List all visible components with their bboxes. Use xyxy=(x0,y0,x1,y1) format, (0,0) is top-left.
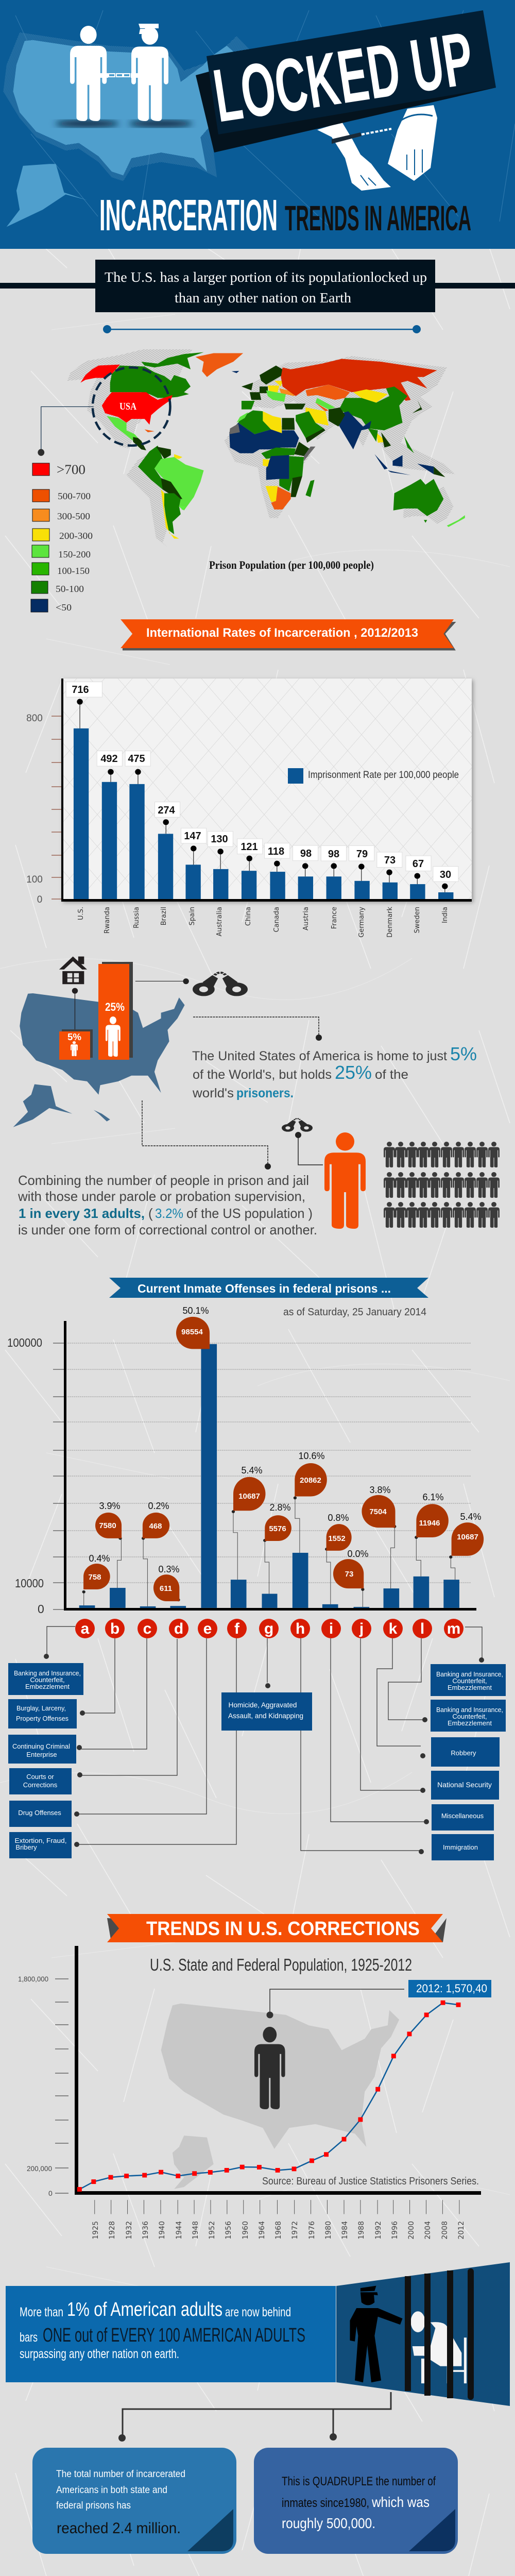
chart value labels: 118 xyxy=(268,846,284,857)
icon: handcuffed hands xyxy=(317,105,437,191)
category labels: Embezzlement xyxy=(448,1684,492,1691)
x labels: 1944 xyxy=(175,2221,183,2240)
legend: prison population colours: >700 xyxy=(57,462,85,477)
text: combined correctional control: 1 in every 31 adults, xyxy=(19,1206,145,1221)
icon: shadows under figures xyxy=(55,120,193,127)
text: chart source: Source: Bureau of Justice Statistics Prisoners Series. xyxy=(262,2176,479,2187)
map: South America xyxy=(138,446,204,538)
leader lines to categories xyxy=(47,1626,482,1851)
icon: orange person xyxy=(324,1132,366,1229)
category labels: Counterfeit, xyxy=(452,1713,487,1720)
chart country labels: Brazil xyxy=(160,907,168,925)
caption: map title: Prison Population (per 100,000 people) xyxy=(209,558,374,571)
heading: trends ribbon: TRENDS IN U.S. CORRECTIONS xyxy=(146,1918,420,1940)
chart value labels: 147 xyxy=(184,831,201,842)
category labels: Embezzlement xyxy=(448,1719,492,1727)
chart value labels xyxy=(72,684,451,880)
bubble percentages: 5.4% xyxy=(460,1512,482,1522)
letter markers a to m: j xyxy=(359,1620,364,1637)
letter markers a to m: i xyxy=(329,1620,333,1637)
connector to orange figure xyxy=(295,1132,323,1165)
card: 2.4 million: The total number of incarcerated xyxy=(56,2469,185,2480)
connector: 2012 callout to person xyxy=(267,1989,404,2019)
letter markers a to m: f xyxy=(234,1620,240,1637)
highlight: dashed ellipse around USA xyxy=(93,367,170,446)
x labels: 1936 xyxy=(142,2221,150,2240)
map: grey USA xyxy=(161,2004,399,2189)
x labels: 1964 xyxy=(258,2221,266,2240)
category labels: Courts or xyxy=(26,1773,54,1781)
letter markers a to m: g xyxy=(264,1620,273,1637)
chart country labels: U.S. xyxy=(77,907,85,920)
text: 5 percent of the world's population xyxy=(192,1043,477,1100)
bubble percentages: 6.1% xyxy=(422,1492,444,1502)
category labels: Embezzlement xyxy=(25,1683,70,1690)
x labels: 2004 xyxy=(424,2221,432,2240)
text: combined correctional control: of the US population ) xyxy=(186,1206,313,1221)
panel: intro headline bar xyxy=(0,260,515,312)
text: 5 percent of the world's population: of the xyxy=(375,1067,408,1082)
category labels: Corrections xyxy=(23,1781,58,1789)
legend: prison population colours: 50-100 xyxy=(56,584,84,594)
chart value labels: 98 xyxy=(328,849,339,860)
category labels: Drug Offenses xyxy=(18,1809,61,1817)
y labels xyxy=(18,1975,53,2197)
panel: hero header: INCARCERATION xyxy=(99,191,278,240)
axis labels: 0 xyxy=(38,1602,44,1616)
chart value labels: 716 xyxy=(72,684,89,696)
x labels: 1980 xyxy=(324,2221,333,2240)
card: quadruple: inmates since1980, xyxy=(282,2496,369,2510)
text: combined correctional control: ( xyxy=(148,1206,153,1221)
label: USA: USA xyxy=(119,401,136,412)
grid lines xyxy=(67,1343,471,1583)
axis labels: 10000 xyxy=(15,1577,44,1590)
chart y labels: 800 xyxy=(26,713,43,724)
connector to legend xyxy=(38,406,94,456)
heading: inmate offenses ribbon xyxy=(109,1278,428,1298)
text: 5 percent of the world's population: world's xyxy=(192,1086,234,1100)
bubble percentages: 3.8% xyxy=(369,1485,391,1495)
bubble percentages: 0.4% xyxy=(89,1553,110,1564)
chart axis xyxy=(61,679,472,902)
text: one in 100 adults: bars xyxy=(20,2330,38,2345)
category labels xyxy=(12,1669,503,1851)
text: combined correctional control: 3.2% xyxy=(155,1206,183,1221)
chart value labels: 98 xyxy=(300,848,312,859)
bubble values: 758 xyxy=(88,1573,101,1582)
category labels: Banking and Insurance, xyxy=(436,1706,503,1714)
category labels: Homicide, Aggravated xyxy=(229,1701,297,1709)
bubble values: 20862 xyxy=(300,1476,321,1485)
chart legend: Imprisonment Rate per 100,000 people xyxy=(308,770,459,781)
callout: 2012 value: 2012: 1,570,40 xyxy=(416,1982,487,1995)
x labels: 1976 xyxy=(308,2221,316,2240)
letter markers a to m xyxy=(75,1619,464,1638)
chart country labels xyxy=(77,907,449,938)
category labels: Miscellaneous xyxy=(441,1812,484,1820)
bubble values: 7504 xyxy=(369,1507,387,1516)
icon: small handcuffs xyxy=(284,1118,311,1131)
chart legend xyxy=(288,768,459,784)
map: Europe xyxy=(242,366,297,410)
x labels: 1960 xyxy=(242,2221,250,2240)
chart country labels: Rwanda xyxy=(104,907,111,934)
map: USA silhouette xyxy=(3,32,250,227)
chart country labels: Germany xyxy=(358,907,366,938)
x labels: 1956 xyxy=(225,2221,233,2240)
text: date note: as of Saturday, 25 January 2014 xyxy=(283,1307,426,1318)
bar: 25 percent xyxy=(98,962,133,1060)
chart y ticks xyxy=(52,716,61,899)
chart y labels: 100 xyxy=(26,874,43,885)
bubble values: 10687 xyxy=(457,1533,478,1541)
legend: prison population colours: <50 xyxy=(56,602,72,613)
chart country labels: Sweden xyxy=(414,907,421,933)
card: 2.4 million: Americans in both state and xyxy=(56,2485,167,2496)
line and markers xyxy=(77,2001,460,2214)
x labels: 1928 xyxy=(108,2221,116,2240)
divider with end dots xyxy=(103,325,421,333)
bars xyxy=(79,1317,484,1608)
map: Oceania xyxy=(393,479,465,527)
x labels: 1988 xyxy=(357,2221,366,2240)
text: one in 100 adults: are now behind xyxy=(225,2305,291,2319)
icon: crowd of prisoners xyxy=(384,1142,500,1228)
y labels: 0 xyxy=(48,2189,53,2197)
card: 2.4 million: federal prisons has xyxy=(56,2500,131,2511)
map: USA blue xyxy=(13,993,185,1127)
bar: 25 percent: 25% xyxy=(105,1001,125,1013)
chart country labels: Denmark xyxy=(386,907,394,938)
chart value labels: 79 xyxy=(356,849,368,860)
text: 5 percent of the world's population: 5% xyxy=(450,1043,477,1064)
bubble values: 5576 xyxy=(269,1524,286,1533)
bubble values: 1552 xyxy=(328,1534,346,1543)
letter markers a to m: h xyxy=(296,1620,305,1637)
chart y labels: 0 xyxy=(37,894,42,905)
card: 2.4 million: reached 2.4 million. xyxy=(57,2520,181,2537)
leader dots xyxy=(44,1654,484,1854)
letter markers a to m: k xyxy=(389,1620,398,1637)
chart country labels: Austria xyxy=(302,907,310,930)
officer xyxy=(350,2286,403,2382)
icon: handcuff chain between figures xyxy=(100,74,139,77)
chart: US corrections population line xyxy=(18,1946,491,2240)
chart country labels: Russia xyxy=(133,907,141,928)
x labels: 1996 xyxy=(391,2221,399,2240)
bubble values: 468 xyxy=(149,1522,162,1531)
heading: international rates ribbon: International Rates of Incarceration , 2012/2013 xyxy=(146,626,418,640)
legend: prison population colours: 500-700 xyxy=(58,491,91,501)
category labels: Counterfeit, xyxy=(30,1676,65,1684)
bubble values: 611 xyxy=(160,1584,172,1593)
bubble percentages: 2.8% xyxy=(269,1502,291,1513)
chart value labels: 130 xyxy=(211,834,228,845)
bubble values: 98554 xyxy=(181,1328,203,1336)
bubble percentages xyxy=(89,1306,482,1574)
chart value labels: 274 xyxy=(158,805,176,816)
chart value labels: 73 xyxy=(384,855,396,866)
y labels: 200,000 xyxy=(27,2164,52,2173)
category labels: Burglay, Larceny, xyxy=(16,1704,66,1712)
bubble percentages: 10.6% xyxy=(298,1451,325,1461)
chart country labels: Spain xyxy=(188,907,196,925)
bubble values: 10687 xyxy=(238,1492,260,1501)
heading: international rates ribbon xyxy=(121,619,456,650)
banner: Locked Up xyxy=(196,10,496,152)
map: Asia xyxy=(281,359,445,477)
panel: 1 in every 31 adults xyxy=(18,1100,500,1238)
text: combined correctional control: Combining the number of people in prison and jail xyxy=(18,1173,309,1188)
chart country labels: India xyxy=(441,907,449,923)
card: quadruple: This is QUADRUPLE the number of xyxy=(282,2475,436,2488)
bubble percentages: 0.8% xyxy=(328,1513,349,1523)
map: North America xyxy=(80,352,243,450)
x labels: 1940 xyxy=(158,2221,166,2240)
x labels: 1925 xyxy=(92,2221,100,2240)
chart y labels xyxy=(26,713,43,905)
letter markers a to m: e xyxy=(203,1620,212,1637)
bubble percentages: 3.9% xyxy=(99,1501,121,1511)
x ticks xyxy=(95,2200,459,2214)
connector: dashed to text xyxy=(142,1100,271,1170)
x labels: 1952 xyxy=(208,2221,216,2240)
category labels: Bribery xyxy=(15,1843,37,1851)
card: quadruple: which was xyxy=(371,2494,430,2510)
letter markers a to m: l xyxy=(420,1620,424,1637)
x labels: 2008 xyxy=(441,2221,449,2240)
heading: trends ribbon xyxy=(107,1914,447,1942)
text: one in 100 adults: More than xyxy=(20,2305,63,2319)
x labels: 1972 xyxy=(291,2221,299,2240)
category labels: Extortion, Fraud, xyxy=(14,1837,67,1844)
bubble percentages: 0.2% xyxy=(148,1501,169,1511)
category labels: National Security xyxy=(437,1781,492,1789)
bubble percentages: 5.4% xyxy=(241,1465,263,1476)
text: one in 100 adults: ONE out of EVERY 100 AMERICAN ADULTS xyxy=(43,2325,305,2346)
teardrop value bubbles xyxy=(83,1317,484,1601)
icon: prisoner figure xyxy=(70,26,107,121)
legend: prison population colours: 100-150 xyxy=(57,566,90,576)
bubble percentages: 0.3% xyxy=(158,1564,180,1574)
heading: inmate offenses ribbon: Current Inmate Offenses in federal prisons ... xyxy=(138,1282,391,1295)
text: combined correctional control xyxy=(18,1173,317,1238)
text: chart subtitle: U.S. State and Federal Population, 1925-2012 xyxy=(150,1955,412,1974)
panel: one percent behind bars xyxy=(6,2262,510,2406)
icon: handcuffs xyxy=(196,973,245,994)
legend: prison population colours: 300-500 xyxy=(57,511,90,521)
category labels: Property Offenses xyxy=(16,1715,68,1722)
bubble values: 7580 xyxy=(99,1521,116,1530)
bubble values xyxy=(88,1328,478,1593)
category labels: Immigration xyxy=(443,1843,478,1851)
legend: prison population colours xyxy=(31,462,93,613)
category labels: Counterfeit, xyxy=(452,1677,487,1685)
category labels: Enterprise xyxy=(26,1751,57,1758)
icon: officer figure xyxy=(131,24,168,121)
text: combined correctional control: with those under parole or probation supervision, xyxy=(18,1189,305,1204)
x labels xyxy=(92,2221,466,2240)
chart value labels: 475 xyxy=(128,753,145,765)
panel: 5 percent vs 25 percent xyxy=(13,957,477,1127)
chart country labels: Canada xyxy=(273,907,281,932)
letter markers a to m: m xyxy=(447,1620,460,1637)
map shadows xyxy=(67,349,455,547)
illustration: officer and prisoner behind bars xyxy=(336,2262,510,2406)
card: 2.4 million xyxy=(32,2448,236,2554)
text: one in 100 adults: 1% of American adults xyxy=(67,2299,222,2320)
x labels: 1968 xyxy=(274,2221,283,2240)
x labels: 2000 xyxy=(407,2221,416,2240)
seated prisoner xyxy=(411,2311,467,2383)
text: 5 percent of the world's population: prisoners. xyxy=(236,1086,294,1100)
bubble percentages: 50.1% xyxy=(182,1306,209,1316)
category labels: Banking and Insurance, xyxy=(436,1670,503,1678)
bar: 5 percent xyxy=(59,1029,93,1060)
panel: hero header xyxy=(0,0,515,249)
icon: dark person xyxy=(254,2027,285,2109)
chart country labels: China xyxy=(245,907,252,926)
callout: 2012 value xyxy=(408,1980,491,1997)
connector: panel to info cards xyxy=(118,2392,391,2442)
chart: international incarceration rates xyxy=(26,679,473,938)
category labels: Continuing Criminal xyxy=(12,1742,70,1750)
legend: prison population colours: 200-300 xyxy=(59,531,93,541)
chart value labels: 492 xyxy=(100,753,118,765)
chart value labels: 121 xyxy=(241,841,258,853)
letter markers a to m: c xyxy=(143,1620,151,1637)
connector to handcuffs xyxy=(135,978,189,984)
letter markers a to m: a xyxy=(81,1620,90,1637)
x labels: 1948 xyxy=(192,2221,200,2240)
chart value labels: 67 xyxy=(413,858,424,870)
bar: 5 percent: 5% xyxy=(67,1032,81,1042)
y labels: 1,800,000 xyxy=(18,1975,48,1983)
chart: world prison population map xyxy=(38,349,465,547)
letter markers a to m: d xyxy=(174,1620,183,1637)
legend: prison population colours: 150-200 xyxy=(58,549,91,560)
x labels: 2012 xyxy=(457,2221,466,2240)
axis labels xyxy=(7,1336,44,1616)
text: 5 percent of the world's population: of the World's, but holds xyxy=(193,1067,332,1082)
x labels: 1932 xyxy=(125,2221,133,2240)
icon: house xyxy=(59,957,87,1031)
letter markers a to m: b xyxy=(110,1620,119,1637)
bubble values: 73 xyxy=(345,1570,353,1579)
map: Africa xyxy=(229,410,315,510)
category boxes xyxy=(8,1663,506,1860)
x labels: 1984 xyxy=(341,2221,349,2240)
bubble values: 11946 xyxy=(419,1519,440,1528)
y ticks xyxy=(55,1979,68,2193)
chart country labels: France xyxy=(331,907,338,929)
category labels: Assault, and Kidnapping xyxy=(228,1711,303,1720)
category labels: Banking and Insurance, xyxy=(14,1669,81,1677)
chart country labels: Australia xyxy=(216,907,224,937)
ticks and axes xyxy=(53,1321,476,1611)
chart bars xyxy=(74,728,453,899)
text: intro headline: The U.S. has a larger portion of its populationlocked up xyxy=(105,269,427,285)
axis labels: 100000 xyxy=(7,1336,42,1349)
bubble connectors xyxy=(84,1498,455,1607)
text: combined correctional control: is under one form of correctional control or another. xyxy=(18,1222,317,1238)
axes xyxy=(75,1946,481,2195)
text: one in 100 adults: surpassing any other nation on earth. xyxy=(20,2347,179,2361)
chart value boxes and pins xyxy=(66,682,458,892)
category labels: Robbery xyxy=(451,1749,476,1757)
chart value labels: 30 xyxy=(440,869,451,880)
cell bars xyxy=(405,2268,474,2400)
text: one in 100 adults xyxy=(20,2299,305,2361)
card: quadruple xyxy=(254,2448,458,2554)
chart: inmate offenses xyxy=(7,1306,506,1860)
x labels: 1992 xyxy=(374,2221,383,2240)
card: quadruple: roughly 500,000. xyxy=(282,2515,375,2531)
connector: dashed to 5 percent text xyxy=(193,1017,322,1041)
text: 5 percent of the world's population: The United States of America is home to just xyxy=(192,1049,447,1063)
text: intro headline: than any other nation on Earth xyxy=(175,290,352,306)
bubble percentages: 0.0% xyxy=(347,1549,369,1559)
text: 5 percent of the world's population: 25% xyxy=(335,1062,372,1083)
